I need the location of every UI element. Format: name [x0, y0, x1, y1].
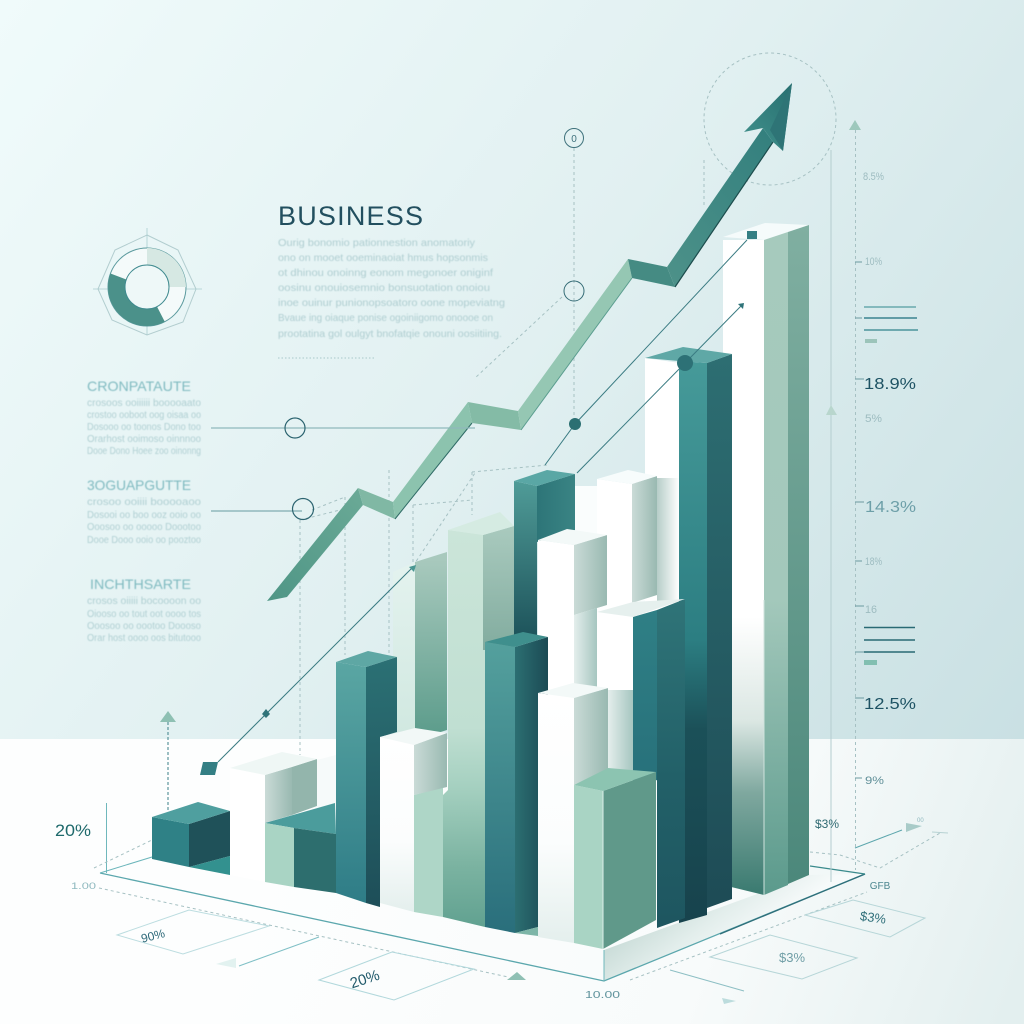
right scale labels: 14.3%: [865, 499, 916, 516]
node on the vertical guide: [564, 281, 584, 301]
intro paragraph: ono on mooet ooeminaoiat hmus hopsonmis: [278, 252, 488, 264]
floor tile one: [117, 910, 269, 954]
floor: [0, 739, 1024, 1024]
left axis labels: 1.00: [71, 881, 96, 891]
donut icon: [93, 228, 202, 335]
bar: small teal box: [152, 802, 230, 875]
intro paragraph: Ourig bonomio pationnestion anomatoriy: [278, 237, 476, 249]
bar: white and teal right column: [597, 599, 685, 928]
callout: second side note: Dooe Dooo ooio oo pooztoo: [87, 535, 201, 546]
guide lines behind the chart: [160, 53, 861, 882]
callout: third side note: INCHTHSARTE: [90, 576, 191, 592]
bar: white back column: [597, 470, 657, 620]
callout: second side note: crosoo ooiiii booooaoo: [87, 497, 201, 508]
callout: first side note: crostoo ooboot oog oisaa oo: [87, 410, 201, 421]
bar: white upper column: [538, 529, 607, 700]
intro paragraph: inoe ouinur punionopsoatoro oone mopeviatng: [278, 297, 505, 309]
bar: tall teal with white side: [575, 347, 732, 923]
intro paragraph: oosinu onouiosemnio bonsuotation onoiou: [278, 282, 490, 294]
leader line with node one: [211, 418, 475, 438]
floor tile four: $3%: [859, 908, 887, 927]
legend lines lower: [864, 628, 915, 665]
leader line with node two: [211, 498, 314, 520]
right scale labels: 18.9%: [864, 376, 916, 393]
intro paragraph: Bvaue ing oiaque ponise ogoiniigomo onoooe on: [278, 312, 493, 324]
bar: light green centre column: [443, 512, 514, 927]
callout: second side note: [87, 477, 201, 546]
floor tile one: 90%: [140, 926, 167, 946]
bar: tallest white and sage: [723, 223, 809, 895]
callout: second side note: Ooosoo oo ooooo Doootoo: [87, 522, 201, 533]
callout: third side note: crosos oiiiii bocoooon oo: [87, 596, 201, 607]
top node with zero: [564, 128, 584, 148]
callout: first side note: CRONPATAUTE: [87, 378, 191, 394]
callout: first side note: Orarhost ooimoso oinnnoo: [87, 434, 201, 445]
floor plane and axis lines: [94, 803, 940, 981]
bar: white low column with teal step: [230, 752, 336, 893]
callout: second side note: 3OGUAPGUTTE: [87, 477, 191, 493]
right scale labels: 18%: [865, 556, 882, 568]
floor pointer lines and arrows: [216, 823, 948, 1004]
background wall: [0, 0, 1024, 739]
right scale labels: [855, 171, 916, 787]
floor tile three: $3%: [779, 950, 805, 965]
bar: white front column: [538, 683, 608, 943]
right scale labels: 8.5%: [863, 171, 884, 183]
trend pointer lines with markers: [200, 231, 757, 775]
intro paragraph: ot dhinou onoinng eonom megonoer oniginf: [278, 267, 493, 279]
floor tile three: [710, 935, 857, 979]
floor tile four: [805, 900, 925, 937]
callout: first side note: Dosooo oo toonos Dono too: [87, 422, 201, 433]
bar: white and light green middle column: [380, 728, 447, 917]
intro paragraph: [278, 237, 505, 340]
left axis labels: 10.00: [585, 990, 621, 1001]
callout: third side note: [87, 576, 201, 644]
floor tile two: [319, 952, 474, 1000]
floor small labels: 00: [917, 818, 924, 824]
right scale labels: 10%: [865, 256, 882, 268]
right scale labels: 5%: [865, 413, 882, 425]
bar: teal left column: [336, 651, 397, 907]
bar: teal centre column: [485, 632, 548, 936]
intro paragraph: prootatina gol oulgyt bnofatqie onouni oosiitiing.: [278, 328, 502, 340]
left axis labels: [55, 821, 621, 1001]
floor small labels: GFB: [870, 881, 891, 892]
callout: first side note: [87, 378, 201, 457]
floor small labels: [815, 817, 924, 892]
rising trend arrow: [267, 83, 792, 601]
callout: first side note: crosoos ooiiiiii booooaato: [87, 398, 201, 409]
top node with zero: 0: [571, 134, 577, 145]
callout: third side note: Orar host oooo oos bitutooo: [87, 633, 201, 644]
callout: first side note: Dooe Dono Hoee zoo oinonng: [87, 446, 201, 457]
callout: third side note: Oiooso oo tout oot oooo tos: [87, 609, 201, 620]
bar: green front column: [574, 768, 656, 949]
heading: BUSINESS: [278, 201, 423, 231]
floor small labels: $3%: [815, 817, 839, 831]
bar: pale green back column: [393, 552, 447, 740]
callout: second side note: Dosooi oo boo ooz ooio oo: [87, 510, 201, 521]
dotted rule under paragraph: [278, 357, 376, 359]
right scale labels: 9%: [865, 775, 884, 787]
right scale labels: 12.5%: [864, 696, 916, 713]
callout: third side note: Ooosoo oo oootoo Doooso: [87, 621, 201, 632]
right scale labels: 16: [865, 604, 877, 616]
left axis labels: 20%: [55, 821, 91, 840]
legend lines upper: [864, 307, 918, 343]
bar: teal back column: [514, 470, 575, 645]
floor tile two: 20%: [348, 967, 382, 992]
3D bar chart: [152, 223, 809, 949]
